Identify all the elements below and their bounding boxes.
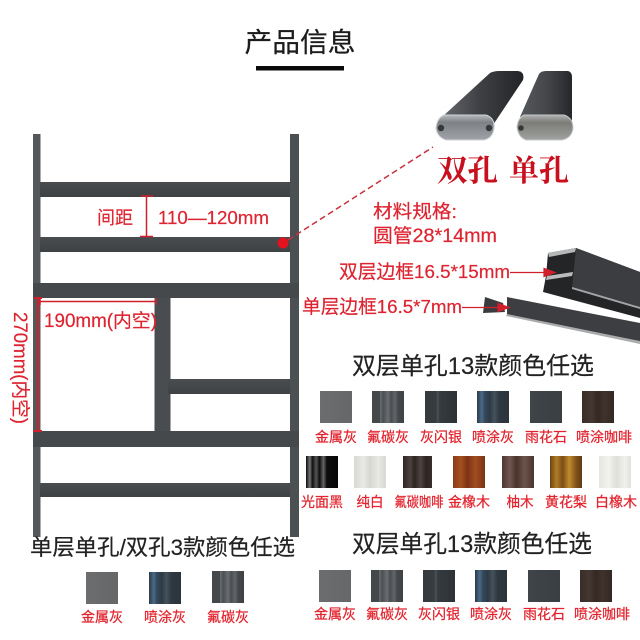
swatch: rain flower stone xyxy=(523,570,565,622)
left post xyxy=(33,134,40,537)
short rail xyxy=(168,379,290,394)
height label: 270mm(内空) xyxy=(9,312,31,424)
swatch: rain flower stone: 雨花石 xyxy=(523,606,565,622)
swatch: fluorocarbon coffee xyxy=(394,456,444,510)
centre vertical bar xyxy=(154,298,170,432)
single frame label: 单层边框16.5*7mm xyxy=(302,296,462,317)
height annotation xyxy=(9,298,42,431)
swatch: golden oak xyxy=(448,456,490,510)
swatch: white oak xyxy=(595,456,637,510)
swatch: spray gray xyxy=(144,572,186,625)
swatch: glossy black xyxy=(301,456,343,510)
swatch: spray coffee: 喷涂咖啡 xyxy=(574,606,630,622)
spacing value: 110—120mm xyxy=(158,207,269,228)
heading: single layer colours: 单层单孔/双孔3款颜色任选 xyxy=(30,535,295,560)
double hole label: 双孔 xyxy=(437,146,498,190)
swatch: huanghuali: 黄花梨 xyxy=(545,494,587,510)
height measure line xyxy=(33,298,42,431)
swatch: gray flash silver xyxy=(418,570,460,622)
swatch: metal gray: 金属灰 xyxy=(315,429,357,445)
double frame label and arrow xyxy=(339,261,555,282)
rail 5 xyxy=(40,483,290,497)
swatch: teak: 柚木 xyxy=(506,494,534,510)
swatch: metal gray: 金属灰 xyxy=(81,609,123,625)
swatch: spray gray xyxy=(472,391,514,445)
swatch row: single layer 3 colours xyxy=(81,571,249,625)
swatch: huanghuali xyxy=(545,456,587,510)
spacing annotation xyxy=(97,196,269,236)
dashed leader xyxy=(288,147,433,240)
title underline xyxy=(256,66,344,70)
swatch: fluorocarbon gray xyxy=(366,570,408,622)
arrow xyxy=(510,268,555,276)
profile: single hole tube xyxy=(517,71,573,140)
swatch: metal gray xyxy=(315,391,357,445)
width annotation xyxy=(40,298,157,332)
callout line with dot xyxy=(278,147,433,248)
swatch: metal gray xyxy=(81,572,123,625)
double frame label: 双层边框16.5*15mm xyxy=(339,261,510,282)
swatch: metal gray xyxy=(314,570,356,622)
swatch: gray flash silver: 灰闪银 xyxy=(420,429,462,445)
spacing label: 间距 xyxy=(97,208,133,228)
rail 1 xyxy=(40,182,290,197)
spacing measure line xyxy=(140,196,153,236)
single frame label and arrow xyxy=(302,296,509,317)
swatch: fluorocarbon gray: 氟碳灰 xyxy=(207,609,249,625)
swatch: gray flash silver: 灰闪银 xyxy=(418,606,460,622)
swatch: teak xyxy=(502,456,534,510)
swatch: pure white xyxy=(354,456,386,510)
swatch: rain flower stone xyxy=(525,391,567,445)
swatch: fluorocarbon gray xyxy=(367,391,409,445)
spec heading: 材料规格: xyxy=(373,201,457,222)
swatch row: double layer bottom xyxy=(314,570,630,622)
profile: double layer frame xyxy=(543,248,640,318)
width label: 190mm(内空) xyxy=(44,310,157,332)
swatch: spray gray: 喷涂灰 xyxy=(144,609,186,625)
swatch: spray gray: 喷涂灰 xyxy=(470,606,512,622)
rail 3 xyxy=(33,283,299,298)
single hole label: 单孔 xyxy=(509,146,569,190)
title: 产品信息 xyxy=(244,28,356,58)
heading: double layer colours top: 双层单孔13款颜色任选 xyxy=(352,353,594,380)
profile: single layer frame xyxy=(483,297,640,344)
swatch: pure white: 纯白 xyxy=(356,494,384,510)
rail 4 xyxy=(33,431,299,447)
swatch: spray coffee: 喷涂咖啡 xyxy=(576,429,632,445)
swatch: metal gray: 金属灰 xyxy=(314,606,356,622)
swatch: fluorocarbon gray: 氟碳灰 xyxy=(367,429,409,445)
material spec text xyxy=(373,201,497,247)
swatch grid: top 13 colours xyxy=(301,391,637,510)
swatch: gray flash silver xyxy=(420,391,462,445)
spec value: 圆管28*14mm xyxy=(373,225,497,247)
heading: double layer colours bottom: 双层单孔13款颜色任选 xyxy=(352,531,592,558)
swatch: rain flower stone: 雨花石 xyxy=(525,429,567,445)
swatch: fluorocarbon coffee: 氟碳咖啡 xyxy=(394,494,444,510)
swatch: spray coffee xyxy=(574,570,630,622)
red dot xyxy=(278,238,288,248)
swatch: spray coffee xyxy=(576,391,632,445)
swatch: white oak: 白橡木 xyxy=(595,494,637,510)
swatch: golden oak: 金橡木 xyxy=(448,494,490,510)
swatch: fluorocarbon gray xyxy=(207,571,249,625)
swatch: spray gray xyxy=(470,570,512,622)
width measure line xyxy=(40,298,156,305)
frame diagram xyxy=(33,134,299,537)
right post xyxy=(290,134,299,537)
rail 2 xyxy=(40,237,290,252)
swatch: glossy black: 光面黑 xyxy=(301,494,343,510)
swatch: fluorocarbon gray: 氟碳灰 xyxy=(366,606,408,622)
arrow xyxy=(462,304,509,312)
swatch: spray gray: 喷涂灰 xyxy=(472,429,514,445)
profile: double hole tube xyxy=(436,71,523,140)
